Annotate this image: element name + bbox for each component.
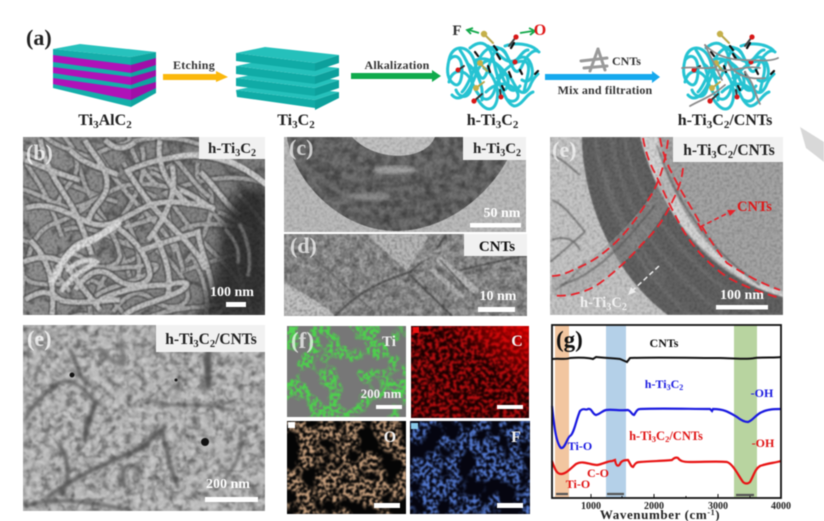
panel letter b: (b) <box>26 140 53 165</box>
label h-Ti3C2: 3 <box>667 383 671 392</box>
label Ti3C2: 2 <box>309 119 315 131</box>
label F: F <box>452 23 462 39</box>
map: Ti: Ti <box>382 334 396 350</box>
icon: h-Ti3C2/CNTs composite mesh <box>682 31 778 109</box>
label h-Ti3C2/CNTs: 3 <box>707 119 713 131</box>
label h-Ti3C2: C <box>240 141 251 157</box>
scale bar <box>470 223 521 228</box>
scale bar <box>716 305 768 310</box>
icon: h-Ti3C2 hierarchical mesh <box>448 31 539 109</box>
dark ribbon band <box>582 137 783 315</box>
map: O: O <box>384 429 396 446</box>
label box <box>199 137 265 159</box>
dark void lower right <box>196 186 270 320</box>
scale label: 100 nm <box>210 285 254 300</box>
highlight band: Ti-O <box>555 325 569 497</box>
label h-Ti3C2/CNTs: C <box>712 112 724 129</box>
icon: Ti3C2 stacked sheets <box>236 47 339 110</box>
map: Ti <box>287 326 406 417</box>
label Ti3AlC2: Ti <box>78 112 93 129</box>
label Ti-O blue: Ti-O <box>568 439 592 453</box>
label h-Ti3C2: h-Ti <box>473 141 500 157</box>
label O: O <box>534 22 546 39</box>
label h-Ti3C2: C <box>611 295 622 311</box>
panel letter e: (e) <box>552 137 576 162</box>
map: O <box>287 421 406 514</box>
label Alkalization: Alkalization <box>364 58 430 72</box>
label Ti3AlC2: 2 <box>126 119 132 131</box>
label CNTs: CNTs <box>650 336 679 350</box>
panel d: TEM of CNTs <box>284 233 527 316</box>
label h-Ti3C2: 2 <box>622 302 627 313</box>
label Ti3C2: C <box>298 112 309 129</box>
panel c: TEM of h-Ti3C2 <box>284 135 526 232</box>
label h-Ti3C2/CNTs: 2 <box>210 339 215 350</box>
label h-Ti3C2: 2 <box>251 148 256 159</box>
label h-Ti3C2/CNTs: C <box>199 331 210 348</box>
panel g: FTIR spectra <box>552 325 791 521</box>
map: Ti: 200 nm <box>361 386 402 401</box>
arrow: etching <box>163 71 228 82</box>
panel letter c: (c) <box>289 135 313 160</box>
highlight band: OH <box>734 325 757 497</box>
icon: CNT bundle <box>581 49 607 71</box>
label h-Ti3C2/CNTs: 3 <box>711 150 717 161</box>
label CNTs: CNTs <box>737 199 772 215</box>
scale bar <box>478 307 515 312</box>
label h-Ti3C2/CNTs: h-Ti <box>165 331 193 348</box>
label h-Ti3C2: h-Ti <box>645 377 667 391</box>
label h-Ti3C2: 3 <box>606 302 611 313</box>
band streaks <box>596 137 760 315</box>
label h-Ti3C2/CNTs: 2 <box>724 119 730 131</box>
spectrum: h-Ti3C2 <box>552 406 781 448</box>
panel f: elemental maps <box>287 326 530 514</box>
label h-Ti3C2: C <box>671 377 679 391</box>
label h-Ti3C2: 3 <box>235 148 240 159</box>
label h-Ti3C2/CNTs: h-Ti <box>683 142 711 159</box>
label C-O: C-O <box>587 466 609 480</box>
label box <box>673 137 783 162</box>
label box <box>156 325 265 352</box>
map: C: C <box>511 333 523 350</box>
scale bar <box>226 302 246 307</box>
label box <box>464 234 527 256</box>
label Ti3C2: 3 <box>292 119 298 131</box>
decorative grey corner mark <box>800 127 824 162</box>
arrow: h-Ti3C2 pointer <box>628 266 659 295</box>
panel letter d: (d) <box>290 233 317 258</box>
x axis ticks <box>591 494 750 498</box>
crossing CNT tube <box>552 166 675 296</box>
label h-Ti3C2/CNTs: /CNTs <box>732 142 775 159</box>
label h-Ti3C2/CNTs: 3 <box>652 434 656 444</box>
map: C <box>411 326 529 418</box>
label h-Ti3C2: 2 <box>516 148 521 159</box>
label -OH red: -OH <box>752 436 775 450</box>
scale label: 10 nm <box>480 289 517 304</box>
panel letter a: (a) <box>26 25 52 50</box>
label h-Ti3C2/CNTs: 3 <box>193 339 199 350</box>
label Ti3AlC2: AlC <box>99 112 126 129</box>
crossing tube walls <box>300 236 527 316</box>
icon: Ti3AlC2 layered block <box>53 44 156 107</box>
label h-Ti3C2: C <box>501 112 513 129</box>
nanoribbon network <box>22 136 265 316</box>
x axis tick labels: 4000 <box>771 501 791 512</box>
panel letter g: (g) <box>556 327 583 352</box>
x axis tick labels: 3000 <box>708 501 728 512</box>
panel a: synthesis scheme <box>26 22 778 131</box>
label h-Ti3C2/CNTs: h-Ti <box>629 429 652 443</box>
panel letter e: (e) <box>27 326 51 351</box>
label h-Ti3C2/CNTs: 2 <box>665 434 669 444</box>
black particles <box>70 372 209 446</box>
label mix and filtration: Mix and filtration <box>558 83 653 97</box>
chart frame <box>552 325 781 498</box>
curved ribbon bundle <box>284 137 526 232</box>
scale label: 100 nm <box>720 288 764 303</box>
label h-Ti3C2: 2 <box>513 119 519 131</box>
label CNTs: CNTs <box>612 54 641 68</box>
label Etching: Etching <box>173 58 215 72</box>
label h-Ti3C2/CNTs: C <box>656 429 665 443</box>
spectrum: h-Ti3C2/CNTs <box>552 458 781 484</box>
label box <box>463 137 526 160</box>
CNT strands <box>682 45 778 106</box>
label h-Ti3C2: h-Ti <box>208 141 235 157</box>
panel b: SEM image <box>22 136 266 316</box>
scale bar <box>205 497 258 502</box>
x axis tick labels <box>581 501 791 512</box>
label Ti3C2: Ti <box>277 112 292 129</box>
label h-Ti3C2/CNTs: 2 <box>728 150 733 161</box>
map: F: F <box>511 429 521 446</box>
scale label: 200 nm <box>206 477 250 492</box>
arrow: mix and filtration <box>545 71 660 83</box>
bright foreground ribbons <box>52 155 265 290</box>
label h-Ti3C2: 3 <box>496 119 502 131</box>
label -OH blue: -OH <box>751 386 774 400</box>
label h-Ti3C2/CNTs: h-Ti <box>678 112 707 129</box>
arrow: F direction <box>467 28 479 34</box>
scale label: 50 nm <box>484 206 521 221</box>
open background regions <box>366 234 430 271</box>
map: Ti: (f) <box>291 328 314 353</box>
label Ti3AlC2: 3 <box>93 119 99 131</box>
label h-Ti3C2: h-Ti <box>467 112 496 129</box>
spectrum: CNTs <box>552 357 781 362</box>
arrow: CNTs pointer <box>698 210 736 231</box>
label h-Ti3C2: 3 <box>500 148 505 159</box>
x axis tick labels: 1000 <box>581 501 601 512</box>
x axis title: -1 <box>707 508 715 517</box>
light left region <box>550 137 668 315</box>
panel e left: TEM overview <box>23 325 265 511</box>
label h-Ti3C2/CNTs: /CNTs <box>214 331 257 348</box>
label h-Ti3C2/CNTs: /CNTs <box>728 112 772 129</box>
arrow: O direction <box>520 28 535 35</box>
dark CNT strands <box>25 345 241 510</box>
label h-Ti3C2: 2 <box>679 383 683 392</box>
red dashed CNT outlines <box>552 138 780 298</box>
x axis tick labels: 2000 <box>644 501 664 512</box>
label Ti-O red: Ti-O <box>566 477 590 491</box>
highlight band: C-O <box>606 325 626 497</box>
map: F <box>410 421 530 514</box>
label CNTs: CNTs <box>479 239 515 255</box>
label h-Ti3C2: C <box>505 141 516 157</box>
label h-Ti3C2: h-Ti <box>580 295 606 311</box>
bright halo along band <box>640 137 783 300</box>
arrow: alkalization <box>351 70 441 82</box>
panel e right: TEM of composite <box>550 137 783 315</box>
label h-Ti3C2/CNTs: C <box>717 142 728 159</box>
band end marks <box>556 494 754 495</box>
label h-Ti3C2/CNTs: /CNTs <box>668 429 703 443</box>
